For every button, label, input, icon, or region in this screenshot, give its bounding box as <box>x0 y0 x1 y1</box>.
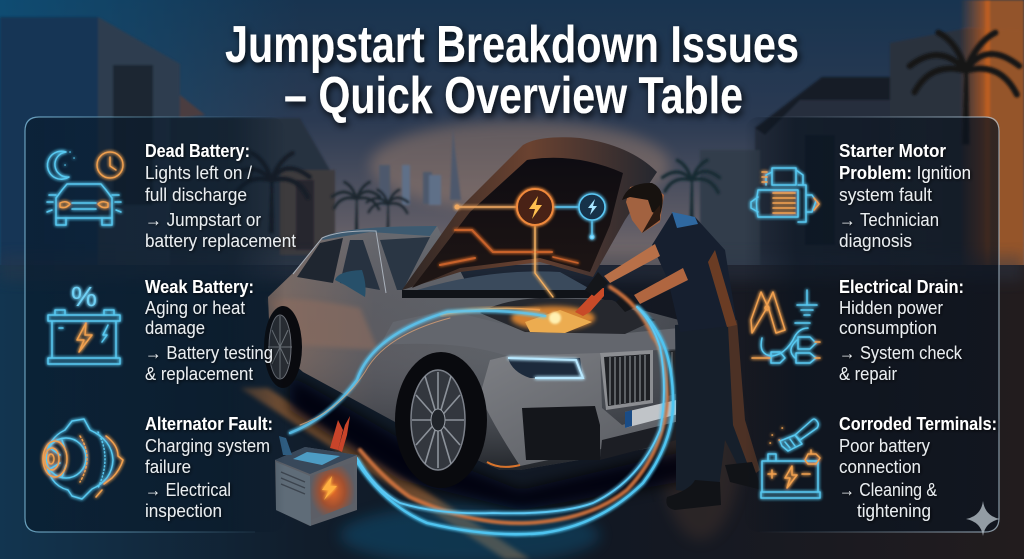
car front face <box>480 353 692 466</box>
title <box>225 16 799 125</box>
technician torso <box>652 212 737 332</box>
car hood surface <box>380 310 690 356</box>
panel: left overview table <box>25 117 296 532</box>
icon: left building <box>0 17 335 300</box>
technician head <box>622 183 664 233</box>
text: Electrical Drain <box>839 277 964 384</box>
car windows <box>293 231 430 293</box>
text: Alternator Fault: Alternator Fault: <box>145 414 273 434</box>
text: Electrical Drain: consumption <box>839 318 937 338</box>
text: Dead Battery: battery replacement <box>145 231 296 251</box>
technician legs <box>675 320 760 495</box>
panel: right overview table <box>745 117 999 532</box>
text: Dead Battery: Lights left on / <box>145 163 252 183</box>
text: Starter Motor Problem: diagnosis <box>839 231 912 251</box>
text: Electrical Drain: → System check <box>839 343 963 363</box>
text: Alternator Fault: → Electrical <box>145 480 231 500</box>
text: Weak Battery: & replacement <box>145 364 253 384</box>
hood circuit traces <box>440 205 594 297</box>
text: Weak Battery: Weak Battery: <box>145 277 254 297</box>
icon: weak battery with percent: % <box>71 281 97 312</box>
text: Corroded Terminals: Poor battery <box>839 436 930 456</box>
text: Weak Battery: → Battery testing <box>145 343 273 363</box>
icon: palm trees <box>231 33 1019 233</box>
text: Weak Battery: Aging or heat <box>145 298 245 318</box>
text: Corroded Terminals: connection <box>839 457 921 477</box>
text: Starter Motor Problem: system fault <box>839 185 932 205</box>
text: Starter Motor Problem: → Technician <box>839 210 939 230</box>
front wheel <box>395 352 487 488</box>
text: Corroded Terminals <box>839 414 997 521</box>
icon: weak battery with percent <box>48 281 120 364</box>
text: Alternator Fault: Charging system <box>145 436 270 456</box>
text: Corroded Terminals: Corroded Terminals: <box>839 414 997 434</box>
text: Corroded Terminals: → Cleaning & <box>839 480 937 500</box>
engine glow and clamp <box>440 288 655 334</box>
icon: orange bolt circle <box>517 189 553 225</box>
text: Dead Battery <box>145 141 296 251</box>
car headlight <box>508 358 583 378</box>
title: Jumpstart Breakdown Issues <box>225 16 799 74</box>
icon: car with moon and clock <box>47 151 123 225</box>
hood open <box>402 137 657 298</box>
icon: corroded battery with brush <box>761 419 820 498</box>
text: Electrical Drain: Electrical Drain: <box>839 277 964 297</box>
illustration: technician <box>585 183 762 510</box>
icon: starter motor <box>751 168 819 222</box>
car mirror <box>335 270 366 297</box>
text: Starter Motor Problem <box>839 141 971 251</box>
car grille <box>600 349 689 410</box>
technician arms <box>585 244 688 312</box>
icon: clamps and ground plug <box>751 290 820 363</box>
text: Starter Motor Problem: Problem: Ignition <box>839 163 971 183</box>
icon: right buildings <box>700 0 1024 300</box>
icon: sparkle watermark <box>966 501 1000 536</box>
text: Dead Battery: Dead Battery: <box>145 141 250 161</box>
title: – Quick Overview Table <box>284 67 743 125</box>
text: Weak Battery <box>145 277 273 384</box>
text: Weak Battery: damage <box>145 318 205 338</box>
car shadow <box>290 375 690 510</box>
illustration: car with open hood <box>264 137 692 510</box>
illustration: portable jump starter <box>275 416 357 526</box>
text: Dead Battery: full discharge <box>145 185 247 205</box>
car body <box>268 226 692 470</box>
text: Alternator Fault: inspection <box>145 501 222 521</box>
icon: distant skyline <box>379 128 461 205</box>
icon: alternator <box>43 419 123 499</box>
text: Dead Battery: → Jumpstart or <box>145 210 261 230</box>
text: Alternator Fault <box>145 414 273 521</box>
text: Starter Motor Problem: Starter Motor <box>839 141 946 161</box>
text: Alternator Fault: failure <box>145 457 191 477</box>
illustration: jump cables <box>290 287 673 534</box>
icon: blue bolt circle <box>579 194 605 220</box>
text: Corroded Terminals: tightening <box>857 501 931 521</box>
car lower bumper and licence plate <box>487 398 692 467</box>
rear wheel <box>264 306 302 388</box>
text: Electrical Drain: & repair <box>839 364 897 384</box>
icon: red clamps <box>330 416 350 452</box>
text: Electrical Drain: Hidden power <box>839 298 943 318</box>
technician shoes <box>666 462 762 510</box>
road surface <box>0 255 1024 559</box>
